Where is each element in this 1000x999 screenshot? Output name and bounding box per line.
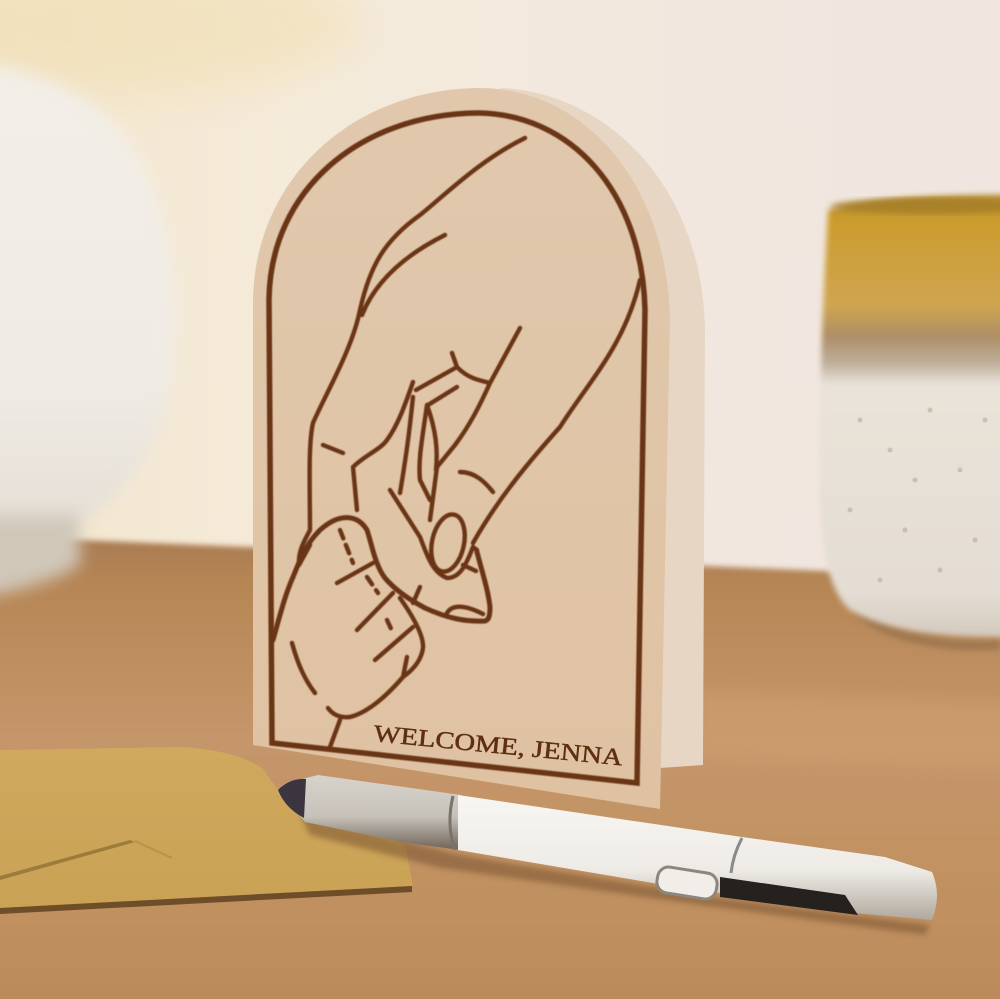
thumbnail oval <box>426 511 470 575</box>
cup shadow <box>850 612 1000 651</box>
card front <box>253 88 670 809</box>
pen clip <box>720 877 858 915</box>
adult hand outline <box>299 138 525 565</box>
blurred ceramic cup <box>820 195 1000 637</box>
wooden desk <box>0 535 1000 999</box>
envelope <box>0 747 413 914</box>
illustration: adult hand holding baby hand <box>273 138 640 747</box>
warm light glow on wall <box>0 0 360 95</box>
wall background <box>0 0 1000 570</box>
card personalised text: WELCOME, JENNA <box>372 721 625 771</box>
card arch frame <box>269 113 645 783</box>
card back panel <box>500 88 705 768</box>
pen shadow <box>300 815 930 935</box>
pen <box>278 775 937 920</box>
baby fingers <box>292 445 493 747</box>
wrist and thumb line <box>473 280 640 543</box>
blurred white vase <box>0 60 175 600</box>
